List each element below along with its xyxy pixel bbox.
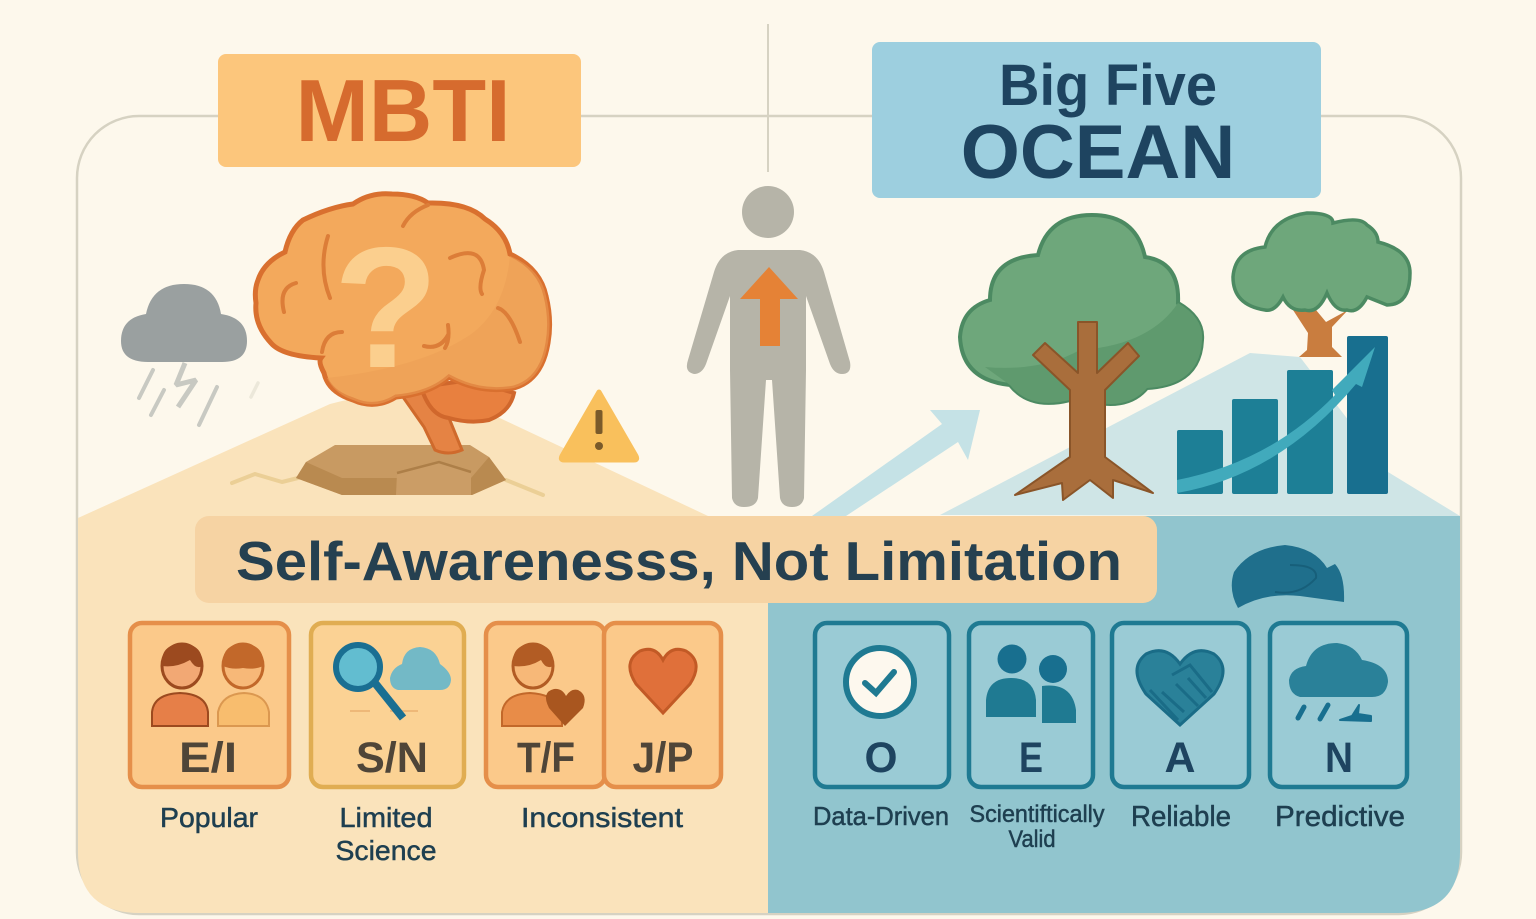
card: S/N: S/N: [356, 734, 428, 782]
card: J/P: [604, 623, 721, 787]
arrow: growth arrow to tree: [812, 410, 980, 516]
label: Limited Science: Limited: [340, 802, 432, 833]
card: N: [1270, 623, 1407, 787]
hill: Big Five: [940, 353, 1460, 516]
card: E/I: E/I: [179, 734, 237, 782]
label: Inconsistent: Inconsistent: [521, 802, 683, 833]
label: Scientiftically Valid: Valid: [1008, 826, 1056, 853]
heading: MBTI: MBTI: [295, 61, 511, 160]
heading: Big Five OCEAN: Big Five: [999, 53, 1217, 118]
label: Limited Science: Science: [336, 835, 436, 866]
label: Popular: Popular: [160, 802, 258, 833]
icon: large tree: [960, 215, 1202, 500]
heading: Big Five OCEAN: [872, 42, 1321, 198]
label: Scientiftically Valid: [970, 801, 1104, 853]
card: N: N: [1325, 734, 1353, 782]
card: A: A: [1164, 734, 1196, 782]
bar chart: rising bars: [1177, 336, 1388, 494]
banner: Self-Awareness: Self-Awarenesss, Not Limitation: [236, 530, 1122, 592]
label: Data-Driven: Data-Driven: [813, 801, 949, 831]
icon: warning triangle: [561, 392, 637, 460]
icon: human figure with arrow: [687, 186, 850, 507]
icon: small blue brain: [1232, 545, 1344, 608]
arrow: trend curve: [1177, 347, 1375, 493]
panel: Big Five lower background: [768, 516, 1460, 913]
card: E: [969, 623, 1093, 787]
card: J/P: J/P: [632, 734, 694, 782]
panel: MBTI lower background: [78, 394, 768, 913]
card: T/F: [486, 623, 605, 787]
panel: frame: [77, 116, 1461, 914]
icon: storm cloud: [121, 284, 258, 425]
card: S/N: [311, 623, 464, 787]
card: T/F: T/F: [517, 734, 575, 782]
icon: cracked rock base: [232, 445, 543, 495]
label: Predictive: Predictive: [1275, 801, 1405, 833]
card: E: E: [1019, 734, 1043, 782]
icon: brain with question mark: [255, 194, 550, 453]
card: O: [815, 623, 949, 787]
card: O: O: [864, 734, 898, 782]
heading: Big Five OCEAN: OCEAN: [961, 110, 1235, 195]
label: Limited Science: [336, 802, 436, 866]
icon: small tree: [1233, 213, 1410, 357]
banner: Self-Awareness: [195, 516, 1157, 603]
card: E/I: [130, 623, 289, 787]
label: Scientiftically Valid: Scientiftically: [970, 801, 1104, 828]
icon: brain with question mark: ?: [333, 212, 439, 404]
label: Reliable: Reliable: [1131, 801, 1231, 833]
heading: MBTI: [218, 54, 581, 167]
card: A: [1112, 623, 1249, 787]
